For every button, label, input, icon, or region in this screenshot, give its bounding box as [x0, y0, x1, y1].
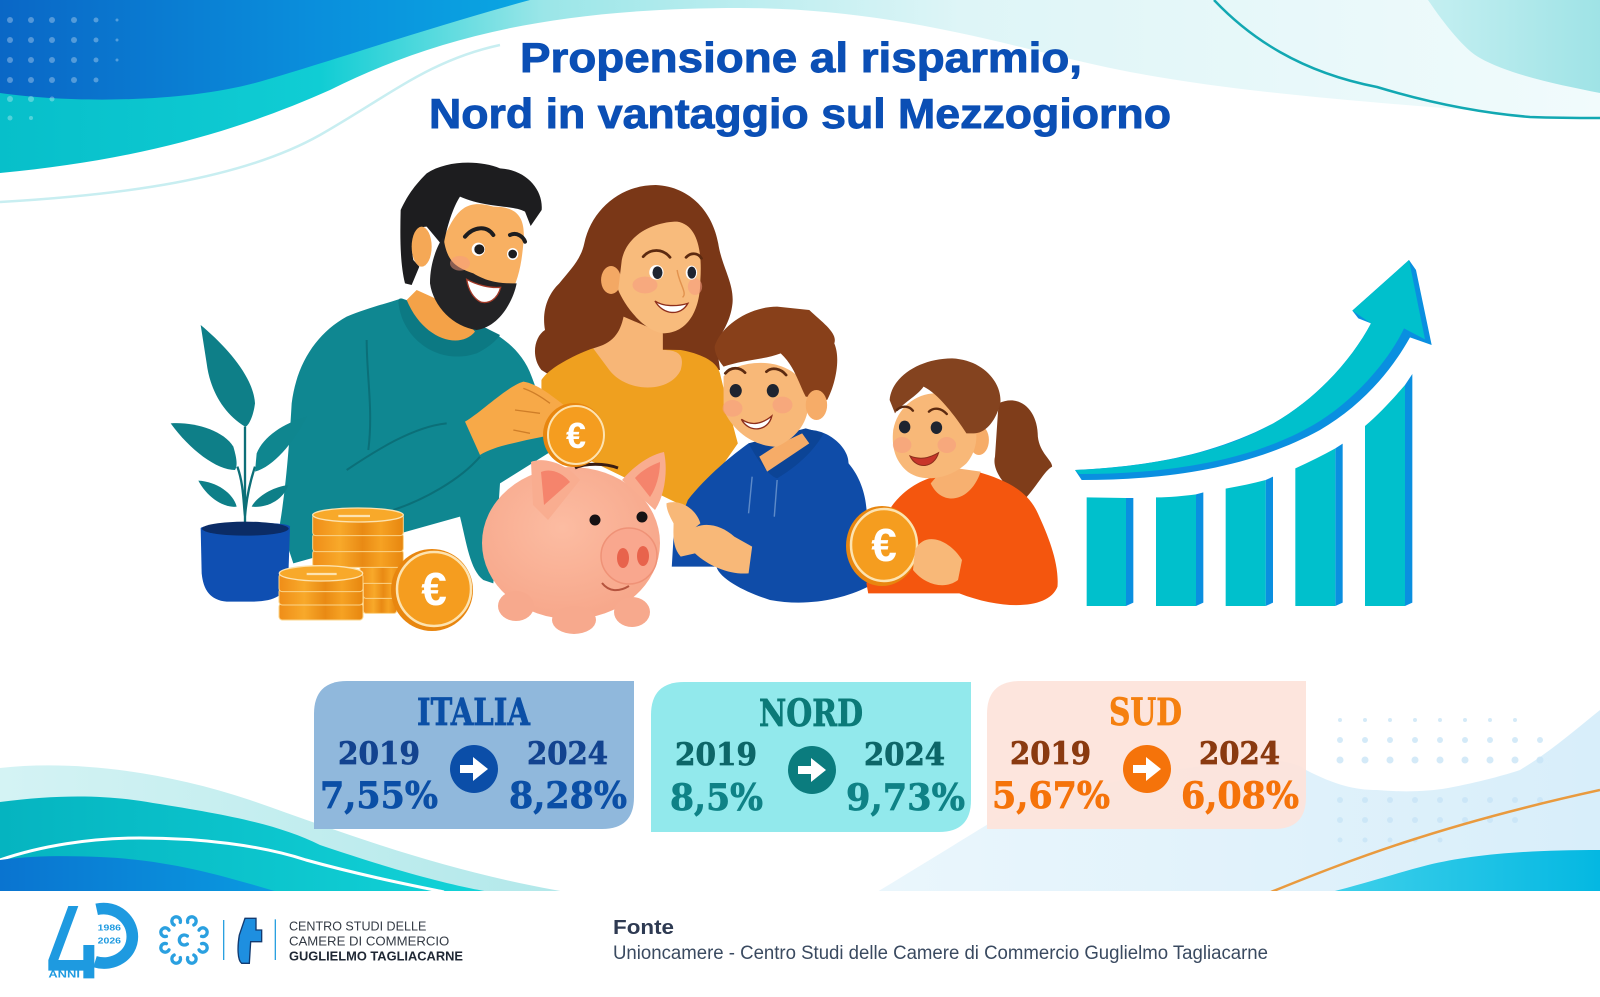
source note: Unioncamere - Centro Studi delle Camere di Commercio Guglielmo Tagliacarne [613, 943, 1268, 964]
icon: arrow [788, 746, 836, 794]
panel: Sud: SUD [1109, 690, 1182, 734]
panel: Italia: ITALIA [417, 690, 531, 734]
panel: Sud: 2019 [1010, 736, 1091, 772]
source note [613, 917, 1268, 964]
logo: 40 anni: ANNI [48, 970, 80, 981]
logo: tagliacarne mark [223, 918, 276, 963]
source note: Fonte [613, 917, 674, 939]
panel: Nord: 2024 [864, 737, 945, 773]
coin stacks [279, 508, 403, 620]
piggy bank [482, 452, 666, 634]
big euro coin: € [421, 563, 447, 615]
euro coin going into the piggy bank [543, 403, 605, 467]
background: bottom left waves [0, 765, 566, 892]
bar chart with rising arrow [1075, 260, 1432, 606]
icon: arrow [450, 745, 498, 793]
man [280, 163, 570, 583]
woman [535, 185, 738, 510]
boy [666, 307, 868, 603]
panel: Sud [987, 681, 1306, 829]
arrow [1075, 260, 1432, 480]
organisation name [289, 919, 463, 963]
panel: Italia: 2024 [527, 736, 608, 772]
background: top waves [0, 0, 1600, 202]
panel: Italia: 2019 [338, 736, 420, 772]
panel: Nord: 9,73% [846, 777, 965, 819]
title: Propensione al risparmio, [520, 34, 1082, 81]
title: Nord in vantaggio sul Mezzogiorno [429, 90, 1171, 137]
organisation name: CAMERE DI COMMERCIO [289, 933, 449, 948]
panel: Nord: 8,5% [670, 777, 763, 819]
euro coin going into the piggy bank: € [566, 415, 586, 456]
panel: Nord [651, 682, 971, 832]
girl's euro coin [846, 506, 962, 586]
plant and pot [171, 325, 307, 602]
title [429, 34, 1171, 137]
organisation name: CENTRO STUDI DELLE [289, 919, 426, 934]
panel: Italia: 8,28% [509, 775, 627, 817]
organisation name: GUGLIELMO TAGLIACARNE [289, 949, 463, 963]
panel: Nord: NORD [759, 691, 863, 735]
logos [48, 906, 463, 981]
footer band [0, 891, 1600, 997]
logo: camere di commercio rosette [159, 915, 209, 965]
panel: Italia: 7,55% [320, 775, 438, 817]
background: bottom right waves [877, 710, 1600, 892]
bars [1087, 374, 1412, 606]
panel: Sud: 6,08% [1181, 775, 1299, 817]
panel: Sud: 2024 [1199, 736, 1280, 772]
panel: Italia [314, 681, 634, 829]
girl [866, 358, 1058, 605]
logo: 40 anni: 1986 [98, 923, 121, 933]
big euro coin [391, 549, 473, 631]
logo: 40 anni: 2026 [98, 935, 121, 945]
icon: arrow [1123, 745, 1171, 793]
panel: Nord: 2019 [675, 737, 757, 773]
girl's euro coin: € [871, 519, 897, 571]
panel: Sud: 5,67% [992, 775, 1110, 817]
illustration: family with piggy bank [171, 163, 1058, 634]
logo: 40 anni [48, 906, 132, 981]
